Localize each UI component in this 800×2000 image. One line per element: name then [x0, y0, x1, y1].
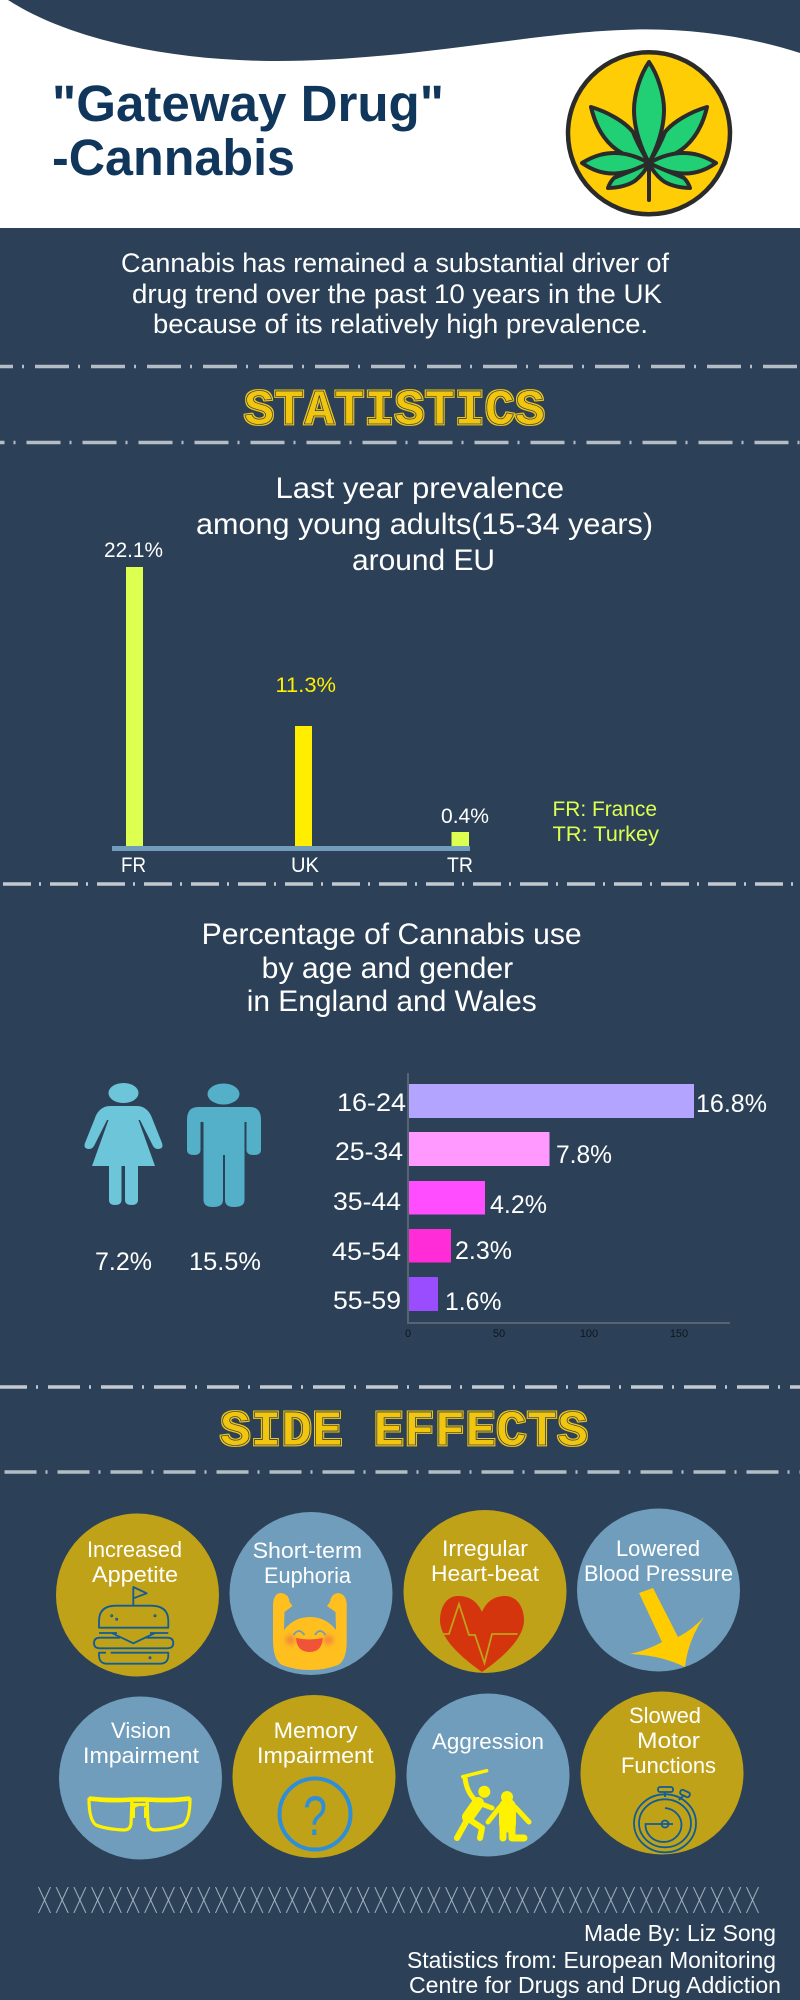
effect: slowed motor functions: Functions — [621, 1753, 716, 1778]
chart title: age and gender — [202, 918, 582, 1018]
chart title: EU prevalence — [196, 472, 653, 577]
effect: vision impairment: Impairment — [83, 1743, 199, 1768]
effect: lowered blood pressure: Lowered — [616, 1536, 700, 1561]
effect: memory impairment: Memory — [274, 1718, 358, 1743]
icon: question mark — [280, 1778, 350, 1850]
legend: FR: France — [552, 798, 657, 821]
bar chart: EU prevalence: UK — [291, 854, 319, 877]
bar chart: age groups: 1.6% — [445, 1288, 502, 1316]
icon: burger — [94, 1587, 173, 1664]
title: "Gateway Drug" — [52, 75, 444, 132]
bar chart: age groups: 100 — [580, 1328, 598, 1340]
bar chart: age groups: 2.3% — [455, 1237, 512, 1265]
heading: statistics: STATISTICS — [244, 383, 545, 440]
bar chart: age groups: 16-24 — [337, 1089, 406, 1117]
effect: slowed motor functions: Slowed — [629, 1703, 701, 1728]
bar chart: EU prevalence — [104, 539, 489, 877]
header panel — [0, 0, 800, 228]
credits: Statistics from: European Monitoring — [407, 1947, 776, 1973]
bar chart: age groups: 55-59 — [333, 1287, 401, 1315]
effect: irregular heart-beat — [404, 1510, 566, 1673]
bar chart: age groups: 0 — [405, 1328, 411, 1340]
effect: short-term euphoria: Short-term — [253, 1538, 362, 1563]
chart title: EU prevalence: among young adults(15-34 years) — [196, 508, 653, 541]
bar chart: age groups: 35-44 — [333, 1188, 401, 1216]
effect: lowered blood pressure: Blood Pressure — [584, 1561, 733, 1586]
credits: Centre for Drugs and Drug Addiction — [409, 1972, 781, 1998]
bar chart: EU prevalence: 22.1% — [104, 539, 163, 562]
bar chart: age groups — [332, 1073, 767, 1340]
icon: heart with pulse — [434, 1596, 524, 1672]
bar chart: age groups: 150 — [670, 1328, 688, 1340]
heading: side effects: SIDE EFFECTS — [220, 1404, 588, 1461]
chart title: age and gender: Percentage of Cannabis use — [202, 918, 582, 951]
icon: happy face — [273, 1593, 347, 1670]
bar chart: age groups: 50 — [493, 1328, 505, 1340]
chart title: age and gender: by age and gender — [262, 952, 513, 985]
chart title: EU prevalence: around EU — [352, 544, 495, 577]
gender percentages — [95, 1248, 261, 1276]
icon: man — [187, 1084, 261, 1207]
bar chart: EU prevalence: 11.3% — [276, 674, 336, 697]
effect: vision impairment: Vision — [111, 1718, 171, 1743]
top wave — [0, 0, 800, 61]
effect: increased appetite: Appetite — [92, 1562, 178, 1587]
intro text: drug trend over the past 10 years in the UK — [132, 279, 662, 309]
icon: fighting figures — [457, 1771, 529, 1838]
icon: woman — [84, 1083, 162, 1205]
bar chart: age groups: 7.8% — [556, 1141, 612, 1169]
effect: slowed motor functions: Motor — [637, 1728, 700, 1753]
bar chart: age groups: 45-54 — [332, 1238, 401, 1266]
credits — [407, 1920, 781, 1998]
bar chart: EU prevalence: FR — [121, 854, 146, 877]
effect: short-term euphoria: Euphoria — [264, 1563, 352, 1588]
effect: memory impairment: Impairment — [257, 1743, 374, 1768]
gender percentages: 15.5% — [189, 1248, 261, 1276]
intro text: because of its relatively high prevalence. — [153, 309, 648, 339]
title — [52, 75, 444, 186]
effect: increased appetite: Increased — [87, 1537, 182, 1562]
effect: vision impairment — [59, 1696, 222, 1860]
icon: glasses — [89, 1798, 190, 1830]
chart title: EU prevalence: Last year prevalence — [276, 472, 564, 505]
effect: slowed motor functions — [580, 1692, 744, 1854]
bar chart: age groups: 25-34 — [335, 1138, 403, 1166]
icon: stopwatch — [634, 1787, 696, 1852]
effect: increased appetite — [56, 1514, 219, 1676]
credits: Made By: Liz Song — [584, 1920, 776, 1946]
effect: memory impairment — [232, 1695, 396, 1858]
effect: irregular heart-beat: Irregular — [442, 1536, 528, 1561]
effect: aggression — [406, 1694, 570, 1856]
bar chart: EU prevalence: 0.4% — [441, 805, 489, 828]
effect: aggression: Aggression — [432, 1729, 544, 1754]
icon: cannabis leaf logo — [568, 52, 730, 214]
bar chart: age groups: 16.8% — [696, 1090, 767, 1118]
bar chart: age groups: 4.2% — [490, 1191, 547, 1219]
effect: lowered blood pressure — [577, 1508, 740, 1672]
gender percentages: 7.2% — [95, 1248, 152, 1276]
legend: TR: Turkey — [552, 823, 660, 846]
icon: down arrow — [630, 1588, 704, 1667]
title: -Cannabis — [52, 129, 295, 186]
effect: short-term euphoria — [230, 1512, 392, 1675]
chart title: age and gender: in England and Wales — [247, 985, 537, 1018]
intro text — [121, 248, 669, 339]
legend — [552, 798, 660, 846]
effect: irregular heart-beat: Heart-beat — [431, 1561, 539, 1586]
bar chart: EU prevalence: TR — [447, 854, 473, 877]
icon: question mark: ? — [303, 1784, 327, 1847]
intro text: Cannabis has remained a substantial driver of — [121, 248, 669, 278]
